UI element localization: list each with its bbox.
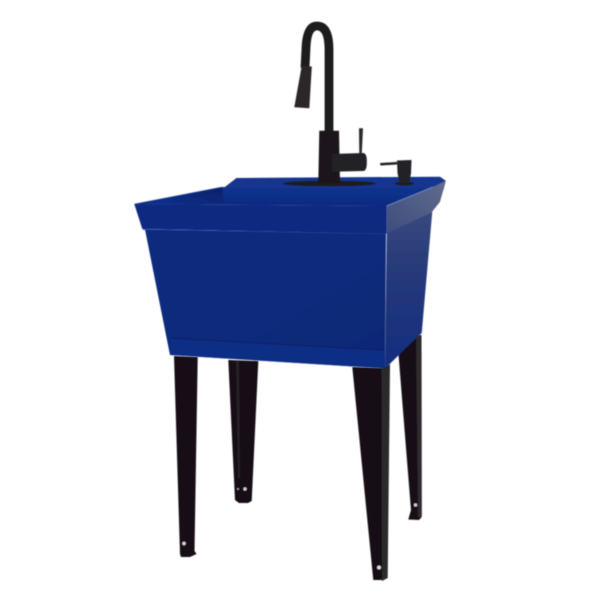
front right leg: [352, 364, 390, 581]
lip seam: [143, 230, 386, 234]
faucet: [283, 26, 376, 186]
faucet body: [318, 131, 340, 183]
soap dispenser: [380, 160, 414, 185]
back left leg: [228, 360, 258, 503]
rim top highlight: [134, 187, 222, 204]
front lip: [134, 204, 387, 234]
rear deck: [221, 177, 446, 190]
basin interior left wall: [140, 187, 224, 204]
front panel: [145, 230, 386, 368]
right rim: [387, 181, 446, 234]
mounting plate: [283, 181, 376, 186]
lever housing: [332, 153, 367, 172]
bottom ledge: [170, 338, 385, 368]
basin interior back wall: [222, 187, 433, 206]
front left leg: [174, 356, 198, 557]
gooseneck spout: [305, 26, 329, 135]
bottom ledge seam: [170, 338, 382, 350]
back right leg: [398, 335, 422, 520]
right side wall: [385, 212, 432, 368]
sink tub: [134, 177, 446, 368]
pull-down spray head: [294, 66, 312, 108]
lever handle: [359, 128, 363, 154]
